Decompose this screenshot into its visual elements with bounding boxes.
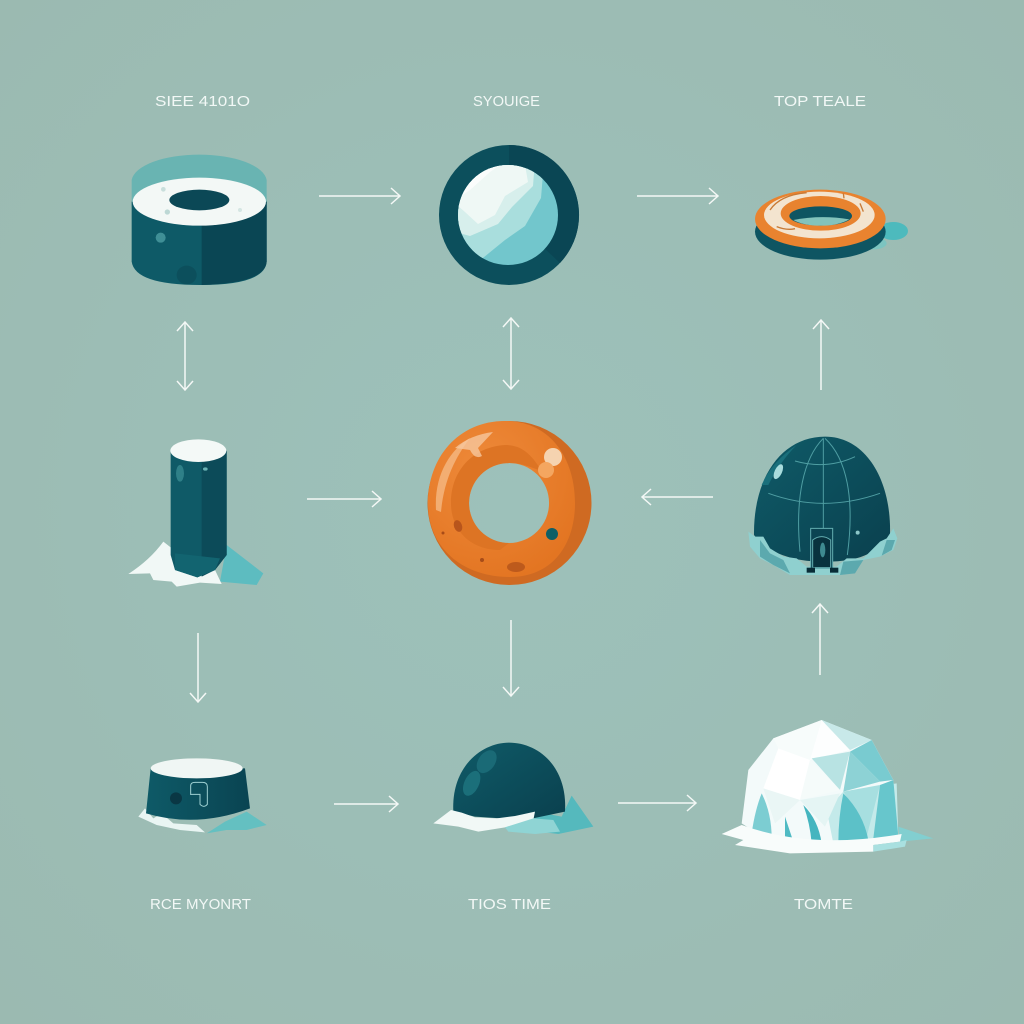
label: top middle: SYOUIGE — [473, 93, 540, 110]
icon: stump on ice — [138, 758, 267, 833]
icon: geodesic ice dome — [722, 720, 933, 853]
arrow: right column up — [820, 320, 822, 390]
icon: orange flat ring — [755, 190, 908, 260]
icon: dark dome — [748, 437, 897, 575]
icon: ice disc — [439, 145, 579, 285]
label: top right: TOP TEALE — [774, 93, 866, 110]
arrow: bottom row 1 — [334, 803, 398, 805]
label: top left: SIEE 4101O — [155, 93, 250, 110]
icon: ring cylinder — [132, 155, 267, 285]
arrow: middle row right — [307, 498, 381, 500]
arrow: top row 1 — [319, 195, 400, 197]
icon: dark half sphere — [433, 743, 593, 834]
arrow: left column down — [197, 633, 199, 702]
label: bottom middle: TIOS TIME — [468, 896, 551, 913]
label: bottom right: TOMTE — [794, 896, 853, 913]
arrow: centre column double — [510, 318, 512, 389]
arrow: centre column down — [510, 620, 512, 696]
arrow: right column lower up — [819, 604, 821, 675]
icon: pillar on ice — [128, 439, 263, 587]
arrow: left column double — [184, 322, 186, 390]
label: bottom left: RCE MYONRT — [150, 896, 251, 913]
arrow: bottom row 2 — [618, 802, 696, 804]
icon: orange ring — [428, 421, 575, 577]
arrow: top row 2 — [637, 195, 718, 197]
arrow: middle row left — [642, 496, 713, 498]
